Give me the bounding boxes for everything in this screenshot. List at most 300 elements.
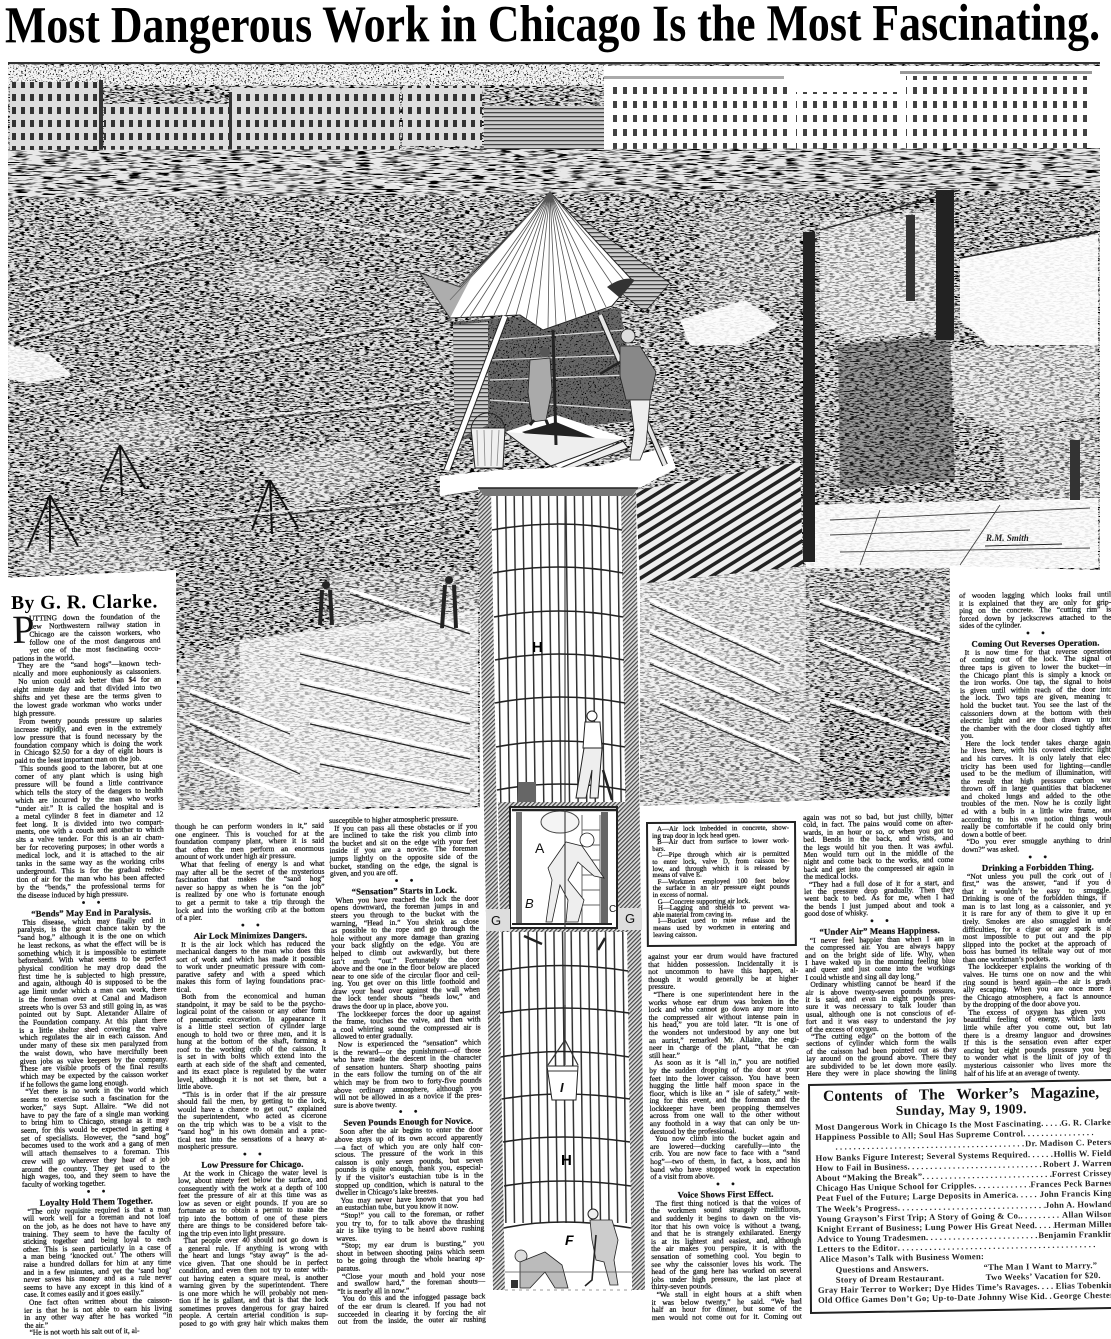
paragraphs: bends: becomes used to the work and a gang of men bbox=[21, 1139, 169, 1150]
paragraphs: bends: This disease, which may finally end in bbox=[22, 915, 165, 926]
paragraphs: sensation: helped to climb out awkwardly, but there bbox=[331, 946, 479, 958]
paragraphs: permit bbox=[329, 814, 478, 878]
lead paragraphs: foundation company which is doing the work bbox=[14, 738, 162, 749]
lead paragraphs: the lowest grade workman who works under bbox=[14, 698, 162, 710]
paragraphs: seven pounds: —a fact of which you are only half con- bbox=[335, 1140, 483, 1152]
paragraphs: permit: given, and you are off. bbox=[330, 868, 398, 878]
paragraphs: ear drum: “There is one superintendent here in the bbox=[653, 988, 798, 999]
paragraphs: loyalty: training. They seem to have the faculty of bbox=[23, 1227, 171, 1238]
paragraphs: energy: though he can perform wonders in it,” said bbox=[175, 821, 324, 831]
paragraphs: bends: paralysis, is the great chance taken by the bbox=[17, 923, 166, 934]
lead paragraphs: eight minute day and that divided into two bbox=[13, 683, 161, 694]
paragraphs: low pressure: posed to go with gray hair which makes them bbox=[179, 1317, 328, 1328]
paragraphs: bends: he least reckons, as what the effect will be is bbox=[18, 938, 166, 950]
paragraphs: bends: high wages, too, and they seem to have the bbox=[22, 1170, 170, 1181]
paragraphs: voice: and that he is strangely exhilarated. Energy bbox=[651, 1228, 801, 1238]
paragraphs: coming out: three taps is given to lower the bucket—in bbox=[960, 661, 1111, 672]
paragraphs: loyalty: in any other way after he has worked “in bbox=[24, 1310, 172, 1322]
heading: Drinking: Drinking a Forbidden Thing. bbox=[982, 861, 1094, 872]
lead paragraphs: a metal cylinder 8 feet in diameter and 12 bbox=[15, 809, 164, 821]
paragraphs: air lock: tical. bbox=[176, 985, 191, 994]
paragraphs: bends recalled: Men would turn out in the middle of the bbox=[804, 848, 954, 859]
paragraphs: coming out: really be comfortable if he could only bring bbox=[961, 821, 1111, 831]
paragraphs: bends recalled: good dose of whisky. bbox=[804, 908, 868, 918]
paragraphs: bends recalled: the medical locks. bbox=[804, 871, 858, 881]
pit hut beneath tent bbox=[453, 308, 640, 478]
paragraphs: permit: jumps lightly on the opposite side of the bbox=[330, 851, 478, 863]
heading: Under Air bbox=[819, 916, 940, 936]
paragraphs: bends: seem, for this would be expected in getting a bbox=[21, 1123, 169, 1135]
paragraphs: seven pounds: shout in between shooting pains which seem bbox=[337, 1246, 485, 1258]
heading: Under Air: • • bbox=[870, 916, 889, 927]
heading: Air Lock: • • bbox=[241, 920, 260, 931]
paragraphs: ear drum: of a visit from above. bbox=[650, 1172, 715, 1181]
paragraphs: under air: the compressed air. You are always happy bbox=[805, 941, 955, 952]
lead paragraphs: sits a valve tender. For this is an air cham- bbox=[16, 833, 164, 844]
paragraphs: sensation: above and the one in the floor below are placed bbox=[332, 961, 480, 973]
labels: lock letters: G bbox=[491, 913, 501, 928]
paragraphs: sensation: ing. You get over on this little foothold and bbox=[332, 977, 480, 988]
paragraphs: air lock: enough to hold two or three men, and it is bbox=[177, 1028, 326, 1039]
lead paragraphs: feet long. It is divided into two compart- bbox=[16, 817, 164, 829]
paragraphs: coming out: the result that high pressure carbon was bbox=[961, 775, 1111, 786]
lead paragraphs: medical lock, and it is attached to the air bbox=[16, 849, 164, 860]
lead paragraphs: which tells the story of the dangers to health bbox=[15, 785, 163, 797]
snow mound under hut bbox=[440, 446, 676, 496]
labels: lock letters bbox=[486, 840, 642, 931]
paragraphs: seven pounds: of the ear drum is cleared. If you had not bbox=[337, 1299, 486, 1311]
paragraphs: permit: susceptible to higher atmospheric pressure. bbox=[329, 814, 458, 825]
labels: lock letters: B bbox=[525, 896, 534, 911]
paragraphs: seven pounds: air is like trying to be heard above rushing bbox=[336, 1223, 484, 1235]
contents list: Two Weeks’ Vacation for $20. bbox=[986, 1270, 1101, 1282]
paragraphs: voice: half an hour for dinner, but some of the bbox=[652, 1304, 802, 1314]
contents list: Chicago Has Unique School for Cripples bbox=[816, 1180, 974, 1193]
paragraphs: bends: streets who is over 53 and still going in, as was bbox=[19, 1000, 167, 1011]
paragraphs: seven pounds: You do this and the infogged passage back bbox=[342, 1292, 485, 1303]
lead paragraphs: underground. This is for the gradual reduc- bbox=[16, 864, 165, 876]
labels: H and F lower: F bbox=[565, 1232, 574, 1248]
paragraphs: sensation: who have made the descent in the character bbox=[333, 1053, 481, 1064]
paragraphs: sensation: Now is experienced the “sensation” which bbox=[338, 1037, 481, 1049]
paragraphs: air lock: parative safety and with a speed which bbox=[176, 968, 325, 979]
contents heading: Contents of The Worker’s Magazine, bbox=[823, 1084, 1099, 1105]
paragraphs: drinking: first,” was the answer, “and if you do bbox=[962, 877, 1111, 888]
paragraphs: low pressure bbox=[178, 1167, 328, 1328]
shaft walls bbox=[478, 490, 645, 1290]
paragraphs: ear drum: floor, which is like an “ isle of safety,” wait- bbox=[649, 1087, 800, 1098]
heading: Coming Out: • • bbox=[1026, 628, 1045, 639]
paragraphs: energy: one engineer. This is vouched for at the bbox=[175, 828, 324, 839]
paragraphs: air lock: to work under pneumatic pressure with com- bbox=[176, 961, 325, 971]
lead paragraphs: shifts and yet these are the terms given to bbox=[13, 690, 161, 702]
lead paragraphs: No union could ask better than $4 for an bbox=[18, 675, 161, 686]
paragraphs: sensation: in the ears follow the turning on of the air bbox=[333, 1068, 482, 1079]
caption text: key A to I: in excess of normal. bbox=[653, 891, 708, 899]
buildings: skyline right bbox=[604, 66, 1100, 152]
paragraphs: energy: lock and into the working crib at the bottom bbox=[176, 904, 325, 915]
paragraphs: coming out: troubles of the men. Now he is cozily light- bbox=[961, 798, 1111, 808]
paragraphs: coming out: down?” was asked. bbox=[962, 844, 1019, 854]
paragraphs: loyalty: One fact often written about the caisson- bbox=[29, 1295, 172, 1307]
paragraphs: air lock: mospheric pressure. bbox=[178, 1142, 238, 1151]
paragraphs: air lock: makes this form of laying foundations prac- bbox=[176, 976, 325, 986]
paragraphs: coming out: “Do you ever smuggle anything to drink bbox=[967, 836, 1111, 846]
paragraphs: bends: will attach themselves to a foreman. This bbox=[21, 1147, 169, 1158]
paragraphs: seven pounds: you try to, for to talk above the thrashing bbox=[336, 1216, 484, 1227]
heading: Loyalty bbox=[40, 1186, 153, 1208]
labels: lock letters: G bbox=[625, 911, 635, 926]
paragraphs: low pressure: sometimes proves dangerous for gray haired bbox=[179, 1302, 328, 1313]
paragraphs: drinking: valves. He turns one on now and the whir- bbox=[963, 968, 1111, 979]
paragraphs: bends: “sand hog,” although it is the one on which bbox=[18, 930, 166, 942]
paragraphs: drinking: half of his life at an average of twenty. bbox=[964, 1067, 1080, 1078]
shaft interior lagging bbox=[491, 490, 632, 1290]
paragraphs: seven pounds: and swallow hard,” the foreman shouts— bbox=[337, 1277, 485, 1288]
paragraphs: coming out: Here the lock tender takes charge again; bbox=[966, 737, 1111, 748]
paragraphs: seven pounds: above stays up of its own accord apparently bbox=[335, 1132, 483, 1144]
paragraphs: loyalty: seems to have any except in this kind of a bbox=[24, 1280, 172, 1292]
paragraphs: drinking: boss has burned its telltale way out of more bbox=[963, 946, 1111, 956]
paragraphs: loyalty: never saves his money and as a rule never bbox=[24, 1272, 172, 1284]
lead paragraphs: ments, one with a couch and another to which bbox=[16, 825, 164, 836]
distant ground streaks bbox=[8, 148, 1100, 198]
paragraphs: air lock: standpoint, it may be said to be the psycho- bbox=[177, 998, 326, 1009]
lead paragraphs: by the “bends,” the professional terms for bbox=[17, 880, 165, 892]
lead paragraphs: Chicago are the caisson workers, who bbox=[29, 627, 160, 639]
heading: Coming Out bbox=[971, 628, 1100, 649]
paragraphs: air lock: “This is in order that if the air pressure bbox=[182, 1088, 326, 1099]
paragraphs: coming out: hold the bucket taut. You see the last of the bbox=[960, 699, 1111, 710]
tent poles bbox=[447, 315, 665, 470]
paragraphs: voice: thirty-seven pounds. bbox=[651, 1282, 713, 1291]
paragraphs: bends: around the country. They get used to the bbox=[22, 1162, 170, 1174]
paragraphs: energy: to get a permit to take a trip through the bbox=[176, 897, 325, 907]
paragraphs: sensation: is the reward—or the punishment—of those bbox=[333, 1045, 481, 1057]
paragraphs: ear drum: neer in charge of the plant, “that he can bbox=[649, 1042, 799, 1052]
lead paragraphs: high pressure. bbox=[14, 708, 56, 718]
paragraphs: coming out: according to his own notion things would bbox=[961, 813, 1111, 824]
paragraphs: voice: the air makes you perspire, it is with the bbox=[651, 1243, 801, 1253]
paragraphs: air lock: “sand hog” in his own domain and a prac- bbox=[178, 1126, 327, 1136]
paragraphs: low pressure: At the work in Chicago the water level is bbox=[183, 1167, 327, 1178]
paragraphs: loyalty: other. This is seen particularly in a case of bbox=[23, 1242, 171, 1254]
panel: excavation scene bbox=[8, 62, 1100, 810]
paragraphs: coming out: electric light and are then drawn up into bbox=[960, 714, 1111, 725]
paragraphs: seven pounds: an eustachian tube, but you know it now. bbox=[336, 1201, 459, 1212]
paragraphs: air lock: and its exact place is regulated by the water bbox=[177, 1066, 326, 1076]
paragraphs: lagging: it is explained that they are only for grip- bbox=[959, 597, 1111, 608]
paragraphs: voice: see why the caissonier loves his work. The bbox=[651, 1258, 801, 1269]
paragraphs: sensation: steers you through to the bucket with the bbox=[331, 908, 479, 920]
paragraphs: voice: jobs under high pressure, the last place at bbox=[651, 1273, 801, 1284]
paragraphs: bends: the waist down, who have mercifully been bbox=[20, 1046, 168, 1058]
paragraphs: drinking: slipped into the pocket at the approach of a bbox=[963, 938, 1111, 949]
paragraphs: ear drum: an aurist,” remarked Mr. Allaire, the engi- bbox=[649, 1034, 799, 1045]
paragraphs: low pressure: trip into the bottom of one of these piers bbox=[178, 1212, 327, 1223]
paragraphs: under air: usual, although one is not conscious of ef- bbox=[806, 1008, 956, 1019]
lead paragraphs: in Chicago $2.50 for a day of eight hours is bbox=[14, 746, 162, 757]
paragraphs: sensation: your back slightly on the edge. You are bbox=[331, 939, 479, 950]
paragraphs: drinking: difficulties, for a cigar or any spark is al- bbox=[962, 923, 1111, 934]
paragraphs: low pressure: low, about ninety feet below the surface, and bbox=[178, 1175, 327, 1185]
paragraphs: ear drum: against your ear drum would have fractured bbox=[648, 950, 798, 961]
lead paragraphs: new Northwestern railway station in bbox=[29, 619, 160, 631]
left snow patches and tripods bbox=[8, 160, 470, 575]
lead paragraphs: which are incurred by the man who works bbox=[15, 793, 163, 805]
heading: Voice: • • bbox=[716, 1179, 735, 1190]
paragraphs: loyalty: a man being ‘knocked out.’ The others will bbox=[23, 1250, 171, 1261]
paragraphs: energy: of a pier. bbox=[176, 913, 202, 922]
paragraphs: bends: given jobs as valve keepers by the company. bbox=[20, 1054, 168, 1065]
contents list: Knight Errant of Business; Lung Power His Great Need bbox=[817, 1220, 1035, 1234]
paragraphs: coming out: you. bbox=[960, 731, 974, 740]
caption text: key A to I: leaving caisson. bbox=[653, 931, 697, 938]
article column 6 bbox=[803, 811, 957, 1078]
lead paragraphs: corner of any plant which is using high bbox=[15, 770, 163, 781]
paragraphs: drinking: tirely. Smokes are also smuggled in under bbox=[962, 915, 1111, 926]
heading: Voice: Voice Shows First Effect. bbox=[677, 1189, 774, 1200]
paragraphs: seven pounds: to be going through the whole hearing ap- bbox=[337, 1254, 485, 1265]
paragraphs: seven pounds: paratus. bbox=[337, 1264, 361, 1273]
paragraphs: loyalty: “He is not worth his salt out of it, al- bbox=[29, 1326, 140, 1337]
paragraphs: bends recalled: cold, in fact. The pains would come on after- bbox=[803, 818, 953, 829]
heading: Voice bbox=[677, 1179, 774, 1200]
article column 1 bbox=[12, 607, 172, 1337]
paragraphs: sensation: the lock tender shouts “heads low,” and bbox=[332, 992, 480, 1003]
contents list: G. R. Clarke bbox=[1061, 1117, 1111, 1128]
paragraphs: loyalty: and in a few minutes, and yet the ‘sand hog’ bbox=[23, 1265, 172, 1276]
paragraphs: ear drum: the wonders not understood by any one but bbox=[649, 1026, 799, 1037]
paragraphs: drinking: ally escaping. When you are once more in bbox=[963, 984, 1111, 994]
paragraphs: lagging: of wooden lagging which looks frail until bbox=[959, 589, 1111, 600]
paragraphs: ear drum: pressure. bbox=[648, 982, 675, 991]
article column 3 bbox=[329, 814, 486, 1326]
byline: By G. R. Clarke. bbox=[11, 591, 158, 614]
paragraphs: coming out: the chamber with the door closed tightly after bbox=[960, 722, 1111, 733]
paragraphs: bends: the Foundation company. At this plant there bbox=[19, 1015, 167, 1027]
paragraphs: under air: I could whistle and sing all day long.” bbox=[805, 971, 919, 982]
caption text: key A to I bbox=[652, 824, 790, 938]
paragraphs: air lock: tical test into the sensations of a heavy at- bbox=[178, 1133, 327, 1144]
paragraphs: drinking: by the dropping of the door above you. bbox=[963, 999, 1080, 1009]
paragraphs: low pressure: fortunate as to obtain a permit to make the bbox=[178, 1205, 327, 1215]
paragraphs: under air: sections of cylinder which form the walls bbox=[806, 1037, 956, 1048]
paragraphs: drinking: ring sound is heard again—the air is gradu- bbox=[963, 976, 1111, 987]
paragraphs: under air: of the excess of oxygen. bbox=[806, 1024, 879, 1034]
paragraphs: air lock: little above. bbox=[177, 1082, 213, 1091]
paragraphs: voice: is at its lightest and easiest, and, although bbox=[651, 1235, 801, 1246]
paragraphs: voice: “We stall in eight hours at a shift when bbox=[657, 1288, 802, 1299]
paragraphs: sensation: hole without any more damage than grazing bbox=[331, 931, 479, 943]
paragraphs: bends: physical condition he may drop dead the bbox=[18, 961, 166, 973]
paragraphs: voice bbox=[650, 1197, 802, 1322]
paragraphs: coming out: It is now time for that reverse operation bbox=[965, 646, 1111, 657]
paragraphs: coming out: the lock. Two taps are given, meaning to bbox=[960, 692, 1111, 702]
paragraphs: air lock: on the trip which was to be a visit to the bbox=[178, 1118, 327, 1129]
paragraphs: bends: age limit under which a man can work, there bbox=[18, 984, 167, 996]
paragraphs: drinking: beautiful feeling of energy, which lasts a bbox=[963, 1014, 1111, 1024]
lead paragraphs: “under air.” It is called the hospital and is bbox=[15, 801, 163, 813]
contents list: John A. Howland bbox=[1045, 1198, 1111, 1209]
paragraphs: sensation: as possible to the rope and go through the bbox=[331, 924, 479, 935]
paragraphs: bends: seems to exercise such a fascination for the bbox=[20, 1093, 169, 1104]
paragraphs: ear drum: are lowered—ducking carefully—into the bbox=[650, 1140, 800, 1151]
paragraphs: ear drum: still hear.” bbox=[649, 1050, 680, 1060]
heading: Bends bbox=[31, 897, 151, 918]
caption text: key A to I: bars. bbox=[652, 846, 665, 853]
lead paragraphs: This sounds good to the laborer, but at one bbox=[20, 762, 163, 773]
paragraphs: energy: fascination that makes the “sand hog” bbox=[175, 874, 325, 884]
paragraphs: bends: which regulates the air in each caisson. And bbox=[19, 1031, 167, 1042]
paragraphs: loyalty bbox=[22, 1204, 172, 1337]
paragraphs: under air: and on the bright side of life. Why, when bbox=[805, 948, 955, 959]
paragraphs: bends bbox=[17, 915, 170, 1189]
caption text: key A to I: H—Lagging and shields to prevent wa- bbox=[658, 904, 790, 912]
contents list: Advice to Young Tradesmen bbox=[817, 1232, 926, 1244]
contents heading bbox=[823, 1084, 1099, 1118]
paragraphs: voice: sensation of something cool. You begin to bbox=[651, 1250, 801, 1261]
paragraphs: sensation: draw your head over against the wall when bbox=[332, 984, 480, 996]
paragraphs: air lock: should fail the men, by getting to the lock, bbox=[177, 1096, 326, 1106]
paragraphs: seven pounds: succeeded in clearing it by forcing the air bbox=[338, 1307, 486, 1319]
caption text: key A to I: ing trap door in lock head open. bbox=[652, 832, 740, 840]
paragraphs: bends: under many of these six men paralyzed from bbox=[19, 1038, 168, 1050]
labels: lock letters: C bbox=[609, 904, 616, 915]
lead paragraphs: UTTING down the foundation of the bbox=[29, 611, 160, 623]
paragraphs: bends recalled: bed. Bends in the back, and wrists, and bbox=[803, 833, 953, 844]
paragraphs: sensation bbox=[330, 893, 482, 1110]
paragraphs: energy: amount of work under high air pressure. bbox=[175, 851, 296, 861]
paragraphs: air lock: of pneumatic excavation. In appearance it bbox=[177, 1013, 326, 1024]
heading: Low Pressure: • • bbox=[243, 1149, 262, 1160]
contents list: Forrest Crissey bbox=[1052, 1168, 1111, 1179]
paragraphs: sensation: of sensation hunters. Sharp shooting pains bbox=[333, 1060, 481, 1072]
paragraphs: low pressure: people. A certain arterial condition is sup- bbox=[179, 1310, 328, 1320]
paragraphs: ear drum: works whose ear drum was broken in the bbox=[648, 996, 799, 1007]
paragraphs: under air: air is above twenty-seven pounds pressure, bbox=[805, 985, 956, 997]
paragraphs: ear drum: hog”—two of them, in fact, a boss, and his bbox=[650, 1155, 800, 1166]
paragraphs: low pressure: feet the pressure of air at this time was as bbox=[178, 1190, 327, 1200]
paragraphs: ear drum: derstood by the professional. bbox=[650, 1126, 737, 1136]
lead paragraphs: low pressure that is found necessary by the bbox=[14, 730, 162, 742]
lead paragraphs: tanks in the same way as the working cribs bbox=[16, 856, 164, 868]
paragraphs: bends: which may be expected by the caisson worker bbox=[20, 1069, 168, 1081]
paragraphs: under air: it is said, and even in eight pounds pres- bbox=[806, 993, 956, 1004]
paragraphs: energy: is realized by one who is fortunate enough bbox=[176, 889, 325, 899]
article column 2 bbox=[174, 821, 328, 1328]
paragraphs: bends recalled bbox=[803, 811, 954, 918]
labels: H and F lower: H bbox=[561, 1152, 572, 1169]
paragraphs: bends: and again, although 40 is supposed to be the bbox=[18, 977, 166, 988]
paragraphs: lagging: sides of the cylinder. bbox=[959, 621, 1021, 630]
paragraphs: coming out: down a bottle of beer. bbox=[961, 829, 1027, 839]
paragraphs: air lock: It is the air lock which has reduced the bbox=[181, 938, 325, 949]
paragraphs: low pressure: is one more which he will probably not men- bbox=[179, 1287, 328, 1298]
paragraphs: sensation: above ordinary atmosphere, although you bbox=[334, 1083, 482, 1095]
heading: Coming Out: Coming Out Reverses Operation. bbox=[971, 637, 1100, 649]
paragraphs: ear drum: hugging the little half moon space in the bbox=[649, 1080, 799, 1090]
contents list: Dr. Madison C. Peters bbox=[1025, 1137, 1111, 1149]
paragraphs: drinking: the Chicago atmosphere, a fact is announced bbox=[963, 991, 1111, 1002]
paragraphs: sensation: will not be allowed in as a novice if the pres- bbox=[334, 1091, 482, 1102]
paragraphs: energy bbox=[174, 821, 325, 922]
paragraphs: lagging: forced down by jackscrews attached to the bbox=[959, 612, 1111, 623]
paragraphs: coming out: thrown off in large quantities that blackened bbox=[961, 783, 1111, 793]
lead paragraphs: P bbox=[12, 607, 35, 652]
lead paragraphs: yet one of the most fascinating occu- bbox=[30, 643, 161, 654]
lead paragraphs: tion of air for the man who has been affected bbox=[17, 872, 165, 884]
paragraphs: bends: if he follows the game long enough. bbox=[20, 1078, 128, 1089]
paragraphs: bends recalled: let the pressure drop gradually. Then they bbox=[804, 885, 954, 896]
paragraphs: voice: and suddenly it begins to dawn on the vis- bbox=[651, 1212, 801, 1223]
caption text: key A to I: G—Concrete supporting air lock. bbox=[658, 898, 750, 905]
paragraphs: loyalty: on the job, as he does not have to have any bbox=[23, 1219, 171, 1231]
paragraphs: energy: that often the men perform an enormous bbox=[175, 843, 324, 854]
paragraphs: voice: men would not come out for it. Coming out bbox=[652, 1311, 802, 1322]
contents list: Benjamin Franklin bbox=[1038, 1229, 1111, 1240]
paragraphs: ear drum: feet into the lower caisson. You have been bbox=[649, 1072, 799, 1082]
paragraphs: coming out: used to be the medium of illumination, with bbox=[961, 768, 1111, 778]
paragraphs: air lock: is a little steel section of cylinder large bbox=[177, 1021, 326, 1031]
contents list: Questions and Answers. bbox=[835, 1263, 929, 1274]
workman: right bbox=[600, 329, 656, 460]
contents list: Hollis W. Field bbox=[1054, 1147, 1111, 1158]
caption text: key A to I: I—Bucket used to raise refuse and the bbox=[658, 917, 790, 925]
paragraphs: coming out: caissoniers down at the bottom with their bbox=[960, 707, 1111, 718]
paragraphs: low pressure: warning given by the superintendent. There bbox=[179, 1280, 328, 1290]
lead paragraphs: increase rapidly, and even in the extremely bbox=[14, 722, 162, 734]
paragraphs: coming out: the Chicago plant this is simply a knock on bbox=[960, 669, 1111, 680]
paragraphs: bends: is a little shelter shed covering the valve bbox=[19, 1023, 167, 1035]
lead paragraphs: pations in the world. bbox=[13, 652, 74, 663]
heading: Under Air: “Under Air” Means Happiness. bbox=[819, 925, 940, 936]
heading: Sensation: “Sensation” Starts in Lock. bbox=[352, 885, 457, 896]
paragraphs: coming out: is given until within reach of the door into bbox=[960, 684, 1111, 695]
paragraphs: low pressure: ing the trip even into light pressure. bbox=[179, 1228, 285, 1238]
paragraphs: low pressure: a general rule. If anything is wrong with bbox=[179, 1242, 328, 1253]
paragraphs: loyalty: raise a hundred dollars for him at any time bbox=[23, 1257, 171, 1269]
article column 5 bbox=[648, 950, 802, 1322]
paragraphs: bends: have to pay the fare of a single man working bbox=[21, 1108, 169, 1120]
lead paragraphs: From twenty pounds pressure up salaries bbox=[19, 714, 162, 726]
caption text: key A to I: B—Air duct from surface to lower work- bbox=[657, 838, 789, 846]
paragraphs: coming out bbox=[960, 646, 1111, 854]
right side: snow, crates and posts bbox=[680, 190, 1098, 568]
paragraphs: ear drum: the compressed air without intense pain in bbox=[649, 1011, 799, 1022]
paragraphs: lagging: ping on the concrete. The “cutting rim” is bbox=[959, 605, 1111, 615]
paragraphs: permit: If you can pass all these obstacles or if you bbox=[334, 821, 477, 833]
paragraphs: ear drum: band who have stopped work in expectation bbox=[650, 1163, 800, 1174]
caption text: key A to I: low, and through which it is released by bbox=[652, 864, 789, 873]
paragraphs: sensation: near to one side of the circular floor and ceil- bbox=[332, 969, 480, 981]
heading: Bends: “Bends” May End in Paralysis. bbox=[31, 906, 151, 918]
contents list bbox=[815, 1117, 1111, 1305]
paragraphs: bends recalled: back and get into the compressed air again in bbox=[804, 863, 954, 874]
paragraphs: bends recalled: went back to bed. As for me, when I had bbox=[804, 892, 954, 903]
lead paragraphs: They are the “sand hogs”—known tech- bbox=[18, 659, 161, 670]
paragraphs: seven pounds: waves. bbox=[336, 1233, 357, 1243]
paragraphs: seven pounds: out from the inside, the outer air rushing bbox=[338, 1315, 486, 1326]
paragraphs: drinking: most impossible to put out and the pipe bbox=[963, 931, 1111, 941]
heading: Seven Pounds bbox=[343, 1107, 473, 1128]
paragraphs: sensation: warning, “Head in.” You shrink as close bbox=[331, 916, 479, 928]
paragraphs: bends: crew will go wherever they hear of a job bbox=[21, 1154, 170, 1166]
heading: Drinking: • • bbox=[1028, 852, 1047, 863]
paragraphs: coming out: ed with a bulb in a little wire frame, and bbox=[961, 805, 1111, 816]
paragraphs: ear drum: crib. You are now face to face with a “sand bbox=[650, 1148, 800, 1158]
caption text: key A to I: means of valve E. bbox=[652, 872, 702, 879]
